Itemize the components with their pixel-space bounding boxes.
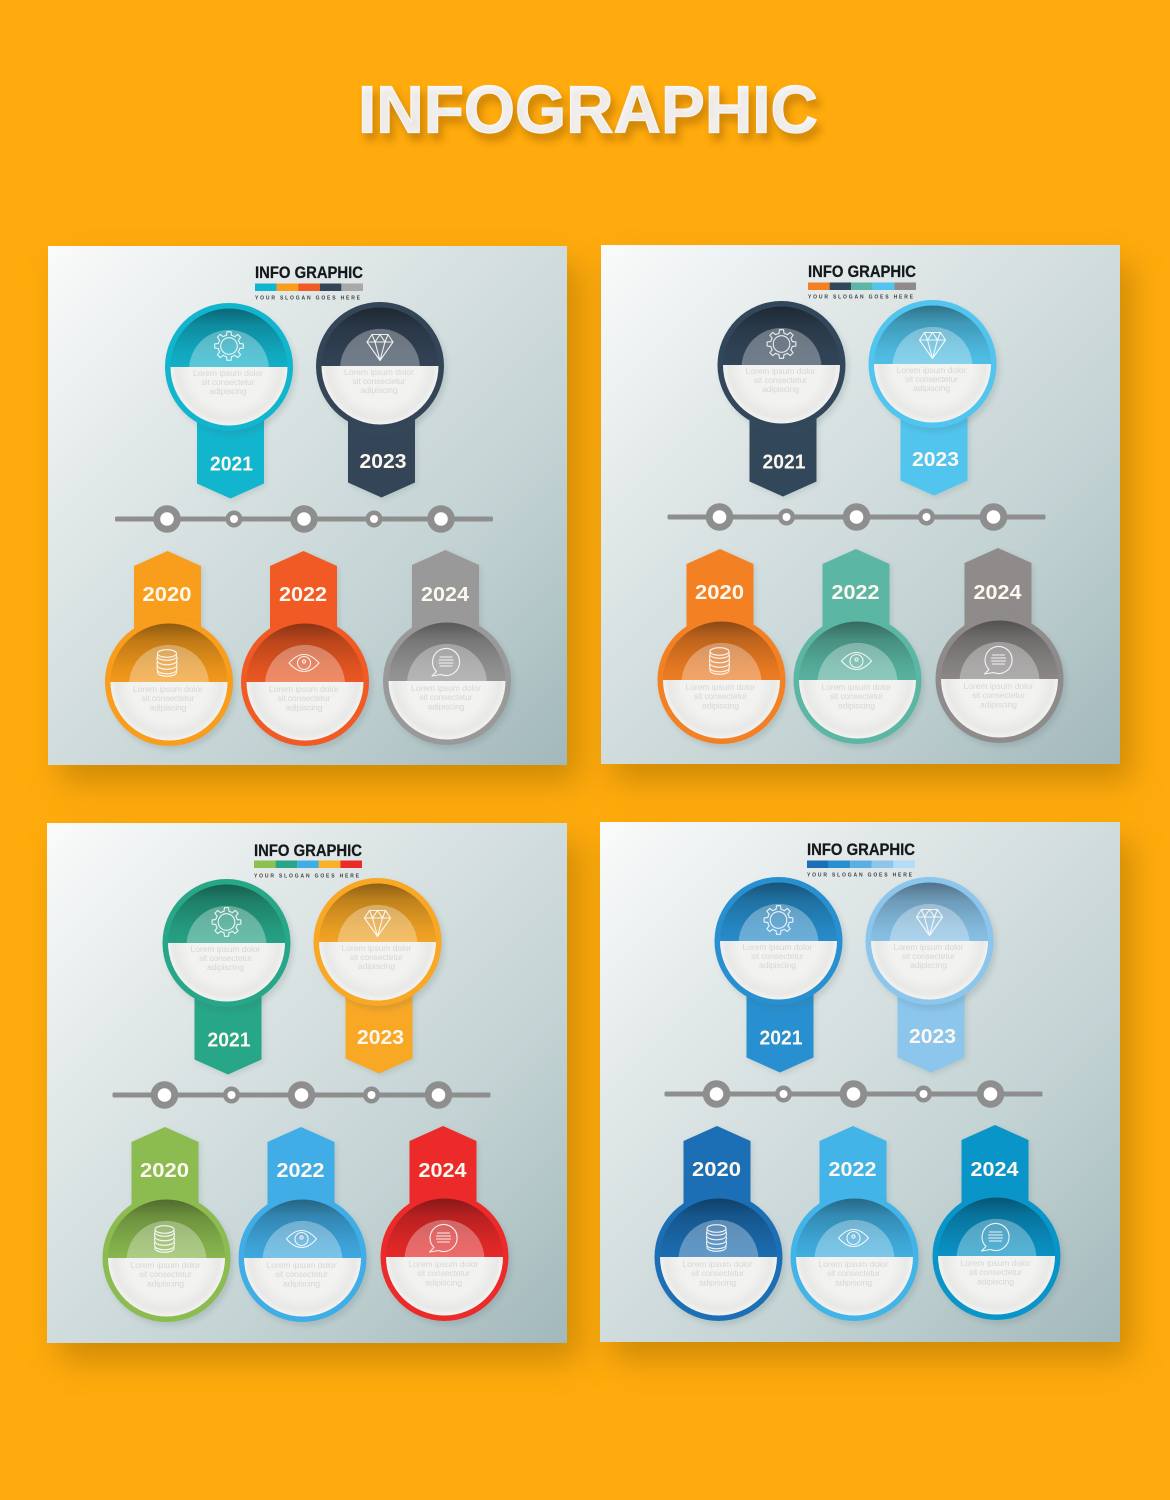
- marker 2021: Lorem ipsum dolor: [742, 942, 813, 952]
- marker 2020: sit consectetur: [694, 691, 747, 701]
- marker 2022: [241, 551, 372, 750]
- marker 2022: [794, 549, 924, 748]
- panel: teal orange set: [48, 246, 579, 783]
- marker 2023: adipiscing: [358, 961, 395, 971]
- marker 2020: adipiscing: [150, 702, 187, 712]
- timeline: [668, 503, 1046, 531]
- marker 2020: 2020: [692, 1158, 741, 1181]
- timeline content: [105, 302, 514, 750]
- panel shadow: [59, 841, 579, 1361]
- marker 2022: adipiscing: [835, 1278, 872, 1288]
- marker 2021: 2021: [208, 1028, 250, 1052]
- marker 2022: [790, 1126, 922, 1325]
- marker 2020: Lorem ipsum dolor: [130, 1260, 201, 1270]
- marker 2023: adipiscing: [910, 960, 947, 970]
- marker 2023: Lorem ipsum dolor: [894, 942, 964, 952]
- marker 2023: [316, 302, 447, 500]
- marker 2024: Lorem ipsum dolor: [411, 683, 481, 693]
- header block: YOUR SLOGAN GOES HERE: [807, 872, 913, 878]
- marker 2020: Lorem ipsum dolor: [686, 682, 756, 692]
- marker 2020: sit consectetur: [139, 1269, 192, 1279]
- marker 2022: Lorem ipsum dolor: [818, 1259, 889, 1269]
- marker 2023: [868, 300, 1000, 498]
- marker 2023: 2023: [357, 1026, 404, 1049]
- marker 2023: [314, 878, 444, 1076]
- marker 2024: [380, 1126, 512, 1325]
- marker 2024: Lorem ipsum dolor: [964, 681, 1034, 691]
- marker 2020: 2020: [695, 581, 744, 604]
- marker 2024: sit consectetur: [417, 1268, 470, 1278]
- header block: YOUR SLOGAN GOES HERE: [255, 296, 361, 302]
- header block: INFO GRAPHIC: [808, 263, 916, 281]
- marker 2021: adipiscing: [207, 962, 244, 972]
- marker 2024: adipiscing: [428, 702, 465, 712]
- marker 2021: Lorem ipsum dolor: [193, 368, 263, 378]
- marker 2022: sit consectetur: [278, 693, 331, 703]
- marker 2022: [238, 1127, 370, 1326]
- marker 2020: adipiscing: [702, 700, 739, 710]
- timeline content: [102, 878, 512, 1326]
- timeline content: [654, 877, 1064, 1325]
- panel shadow: [60, 264, 579, 783]
- header block: [807, 841, 915, 878]
- panel shadow: [612, 840, 1132, 1360]
- panel background: [601, 245, 1120, 764]
- marker 2023: 2023: [360, 450, 406, 473]
- panel shadow: [613, 263, 1132, 782]
- marker 2023: adipiscing: [360, 385, 398, 395]
- marker 2020: Lorem ipsum dolor: [682, 1259, 753, 1269]
- timeline content: [658, 300, 1066, 748]
- marker 2020: [102, 1127, 234, 1326]
- marker 2023: Lorem ipsum dolor: [896, 365, 967, 375]
- marker 2023: sit consectetur: [905, 374, 958, 384]
- marker 2020: adipiscing: [699, 1278, 736, 1288]
- header block: INFO GRAPHIC: [807, 841, 915, 859]
- marker 2024: adipiscing: [425, 1278, 462, 1288]
- marker 2023: Lorem ipsum dolor: [344, 367, 414, 377]
- timeline: [115, 505, 493, 533]
- marker 2024: 2024: [418, 1159, 467, 1182]
- marker 2023: adipiscing: [913, 383, 950, 393]
- panel background: [48, 246, 567, 765]
- header block: [808, 263, 916, 300]
- marker 2020: sit consectetur: [142, 693, 195, 703]
- header block: [254, 842, 362, 880]
- marker 2024: sit consectetur: [972, 690, 1025, 700]
- marker 2024: Lorem ipsum dolor: [960, 1258, 1031, 1268]
- marker 2022: sit consectetur: [827, 1268, 880, 1278]
- panel: blue set: [600, 822, 1132, 1360]
- marker 2022: Lorem ipsum dolor: [266, 1260, 337, 1270]
- marker 2023: sit consectetur: [350, 952, 403, 962]
- marker 2022: 2022: [828, 1158, 876, 1181]
- marker 2022: 2022: [276, 1159, 324, 1182]
- header block: INFO GRAPHIC: [254, 842, 362, 860]
- marker 2022: adipiscing: [283, 1278, 320, 1288]
- marker 2023: 2023: [909, 1025, 956, 1048]
- marker 2021: 2021: [760, 1026, 802, 1050]
- marker 2024: adipiscing: [980, 700, 1017, 710]
- marker 2021: [718, 301, 848, 499]
- marker 2021: Lorem ipsum dolor: [746, 366, 816, 376]
- marker 2024: [383, 550, 514, 749]
- marker 2024: [932, 1125, 1064, 1324]
- marker 2021: adipiscing: [210, 386, 247, 396]
- marker 2024: 2024: [421, 583, 470, 606]
- marker 2021: [162, 879, 294, 1077]
- marker 2020: Lorem ipsum dolor: [133, 684, 203, 694]
- marker 2024: sit consectetur: [420, 692, 473, 702]
- marker 2022: sit consectetur: [830, 691, 883, 701]
- header block: YOUR SLOGAN GOES HERE: [254, 874, 360, 880]
- panel: green amber set: [47, 823, 579, 1361]
- header block: YOUR SLOGAN GOES HERE: [808, 294, 914, 300]
- marker 2021: [714, 877, 846, 1075]
- marker 2022: Lorem ipsum dolor: [822, 682, 892, 692]
- panel: navy sky set: [601, 245, 1132, 782]
- marker 2020: sit consectetur: [691, 1268, 744, 1278]
- header block: INFO GRAPHIC: [255, 264, 363, 282]
- marker 2021: adipiscing: [759, 960, 796, 970]
- timeline: [112, 1081, 490, 1109]
- marker 2023: Lorem ipsum dolor: [342, 943, 412, 953]
- marker 2020: 2020: [140, 1159, 189, 1182]
- marker 2024: 2024: [974, 581, 1022, 604]
- marker 2021: Lorem ipsum dolor: [190, 944, 261, 954]
- marker 2021: 2021: [210, 452, 253, 476]
- title: INFOGRAPHIC: [358, 72, 818, 148]
- marker 2020: [658, 549, 788, 748]
- marker 2021: sit consectetur: [199, 953, 252, 963]
- marker 2021: [165, 303, 296, 501]
- marker 2023: sit consectetur: [902, 951, 955, 961]
- marker 2022: 2022: [279, 583, 327, 606]
- panel background: [47, 823, 567, 1343]
- marker 2020: [654, 1126, 786, 1325]
- timeline: [664, 1080, 1042, 1108]
- marker 2020: 2020: [142, 583, 192, 606]
- marker 2022: adipiscing: [838, 700, 875, 710]
- marker 2023: sit consectetur: [352, 376, 406, 386]
- marker 2024: sit consectetur: [969, 1267, 1022, 1277]
- marker 2021: 2021: [762, 450, 806, 474]
- marker 2021: adipiscing: [762, 384, 799, 394]
- marker 2022: Lorem ipsum dolor: [269, 684, 339, 694]
- marker 2022: 2022: [832, 581, 880, 604]
- marker 2022: adipiscing: [286, 702, 323, 712]
- marker 2023: 2023: [912, 448, 959, 471]
- marker 2020: adipiscing: [147, 1278, 184, 1288]
- header block: [255, 264, 363, 302]
- marker 2020: [105, 551, 236, 750]
- marker 2022: sit consectetur: [275, 1269, 328, 1279]
- marker 2021: sit consectetur: [754, 375, 807, 385]
- marker 2024: Lorem ipsum dolor: [408, 1259, 479, 1269]
- marker 2021: sit consectetur: [202, 377, 255, 387]
- marker 2024: [936, 548, 1066, 747]
- marker 2024: 2024: [970, 1158, 1019, 1181]
- marker 2021: sit consectetur: [751, 951, 804, 961]
- panel background: [600, 822, 1120, 1342]
- marker 2023: [866, 877, 996, 1075]
- marker 2024: adipiscing: [977, 1276, 1014, 1286]
